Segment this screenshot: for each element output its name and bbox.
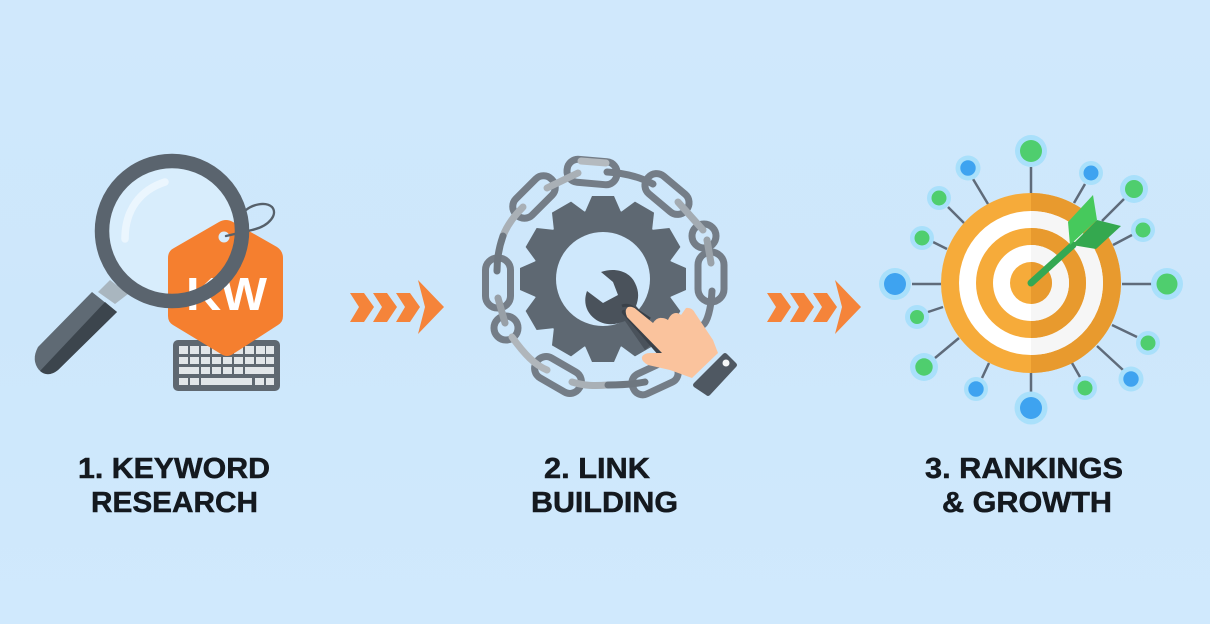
icon: chain ring bbox=[486, 158, 724, 398]
heading: step 1: RESEARCH bbox=[91, 487, 258, 519]
arrow: step 2 to 3 bbox=[767, 280, 861, 334]
icon: magnifier lens bbox=[108, 167, 236, 295]
icon: keyboard bbox=[173, 340, 280, 391]
heading: step 2: BUILDING bbox=[531, 487, 678, 519]
icon: gear bbox=[520, 196, 686, 362]
heading: step 3: 3. RANKINGS bbox=[925, 453, 1123, 485]
heading: step 2 bbox=[531, 453, 678, 519]
heading: step 3: & GROWTH bbox=[942, 487, 1112, 519]
icon: wrench bbox=[585, 270, 662, 350]
icon: keyword research bbox=[35, 161, 283, 391]
icon: target bbox=[941, 193, 1121, 373]
icon: KW price tag bbox=[168, 204, 283, 356]
heading: step 3 bbox=[925, 453, 1123, 519]
icon: link building bbox=[486, 158, 737, 398]
network connector lines bbox=[912, 167, 1152, 392]
arrow: step 1 to 2 bbox=[350, 280, 444, 334]
network nodes bbox=[879, 135, 1183, 424]
heading: step 2: 2. LINK bbox=[544, 453, 650, 485]
heading: step 1 bbox=[78, 453, 270, 519]
heading: step 1: 1. KEYWORD bbox=[78, 453, 270, 485]
icon: rankings network and target bbox=[879, 135, 1183, 424]
tag text: KW bbox=[186, 268, 268, 320]
icon: pointing hand bbox=[622, 305, 737, 396]
icon: magnifying glass handle and ring bbox=[35, 161, 242, 374]
icon: dart bbox=[1031, 195, 1121, 283]
icon: shirt cuff bbox=[693, 353, 737, 396]
